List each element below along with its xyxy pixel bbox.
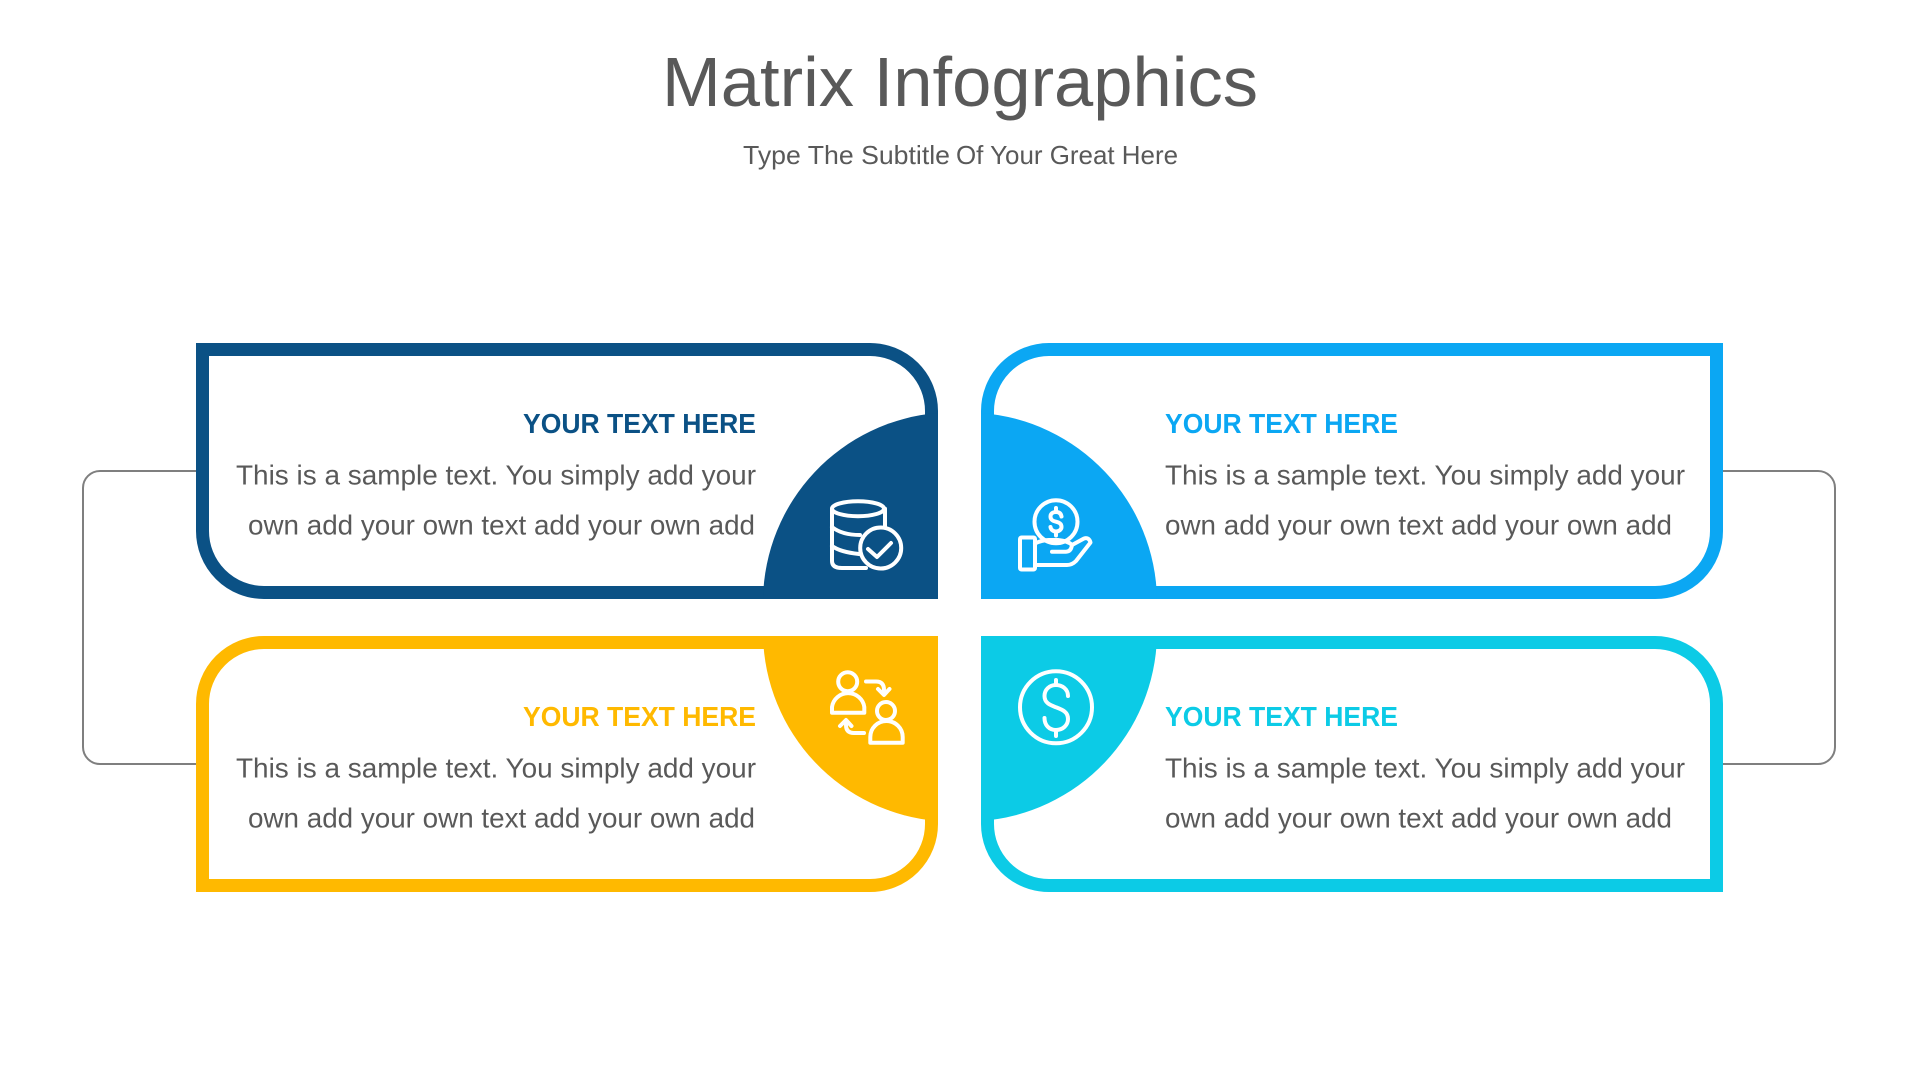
body text [1165, 460, 1685, 540]
body text: own add your own text add your own add [1165, 802, 1672, 834]
panel: top left navy [202, 350, 938, 599]
body text: This is a sample text. You simply add your [1165, 752, 1685, 784]
heading: YOUR TEXT HERE [1165, 701, 1398, 732]
panel border [202, 642, 932, 886]
heading: YOUR TEXT HERE [1165, 408, 1398, 439]
body text: This is a sample text. You simply add your [236, 460, 756, 490]
body text: own add your own text add your own add [248, 802, 755, 834]
panel border [988, 350, 1716, 592]
body text [236, 752, 756, 834]
heading: YOUR TEXT HERE [523, 701, 756, 732]
right connector line [1709, 471, 1835, 764]
title: Matrix Infographics [662, 43, 1258, 121]
corner wedge [763, 636, 938, 821]
subtitle: Of Your Great Here [956, 140, 1178, 170]
icon: people exchange [832, 672, 903, 743]
left connector line [83, 471, 196, 764]
panel: bottom right cyan [981, 636, 1716, 886]
body text: This is a sample text. You simply add your [1165, 460, 1685, 490]
icon: hand holding coin [1020, 500, 1090, 570]
subtitle: Type The Subtitle [743, 140, 950, 170]
icon: dollar coin [1020, 671, 1092, 743]
body text: own add your own text add your own add [248, 510, 755, 540]
corner wedge [981, 636, 1157, 821]
body text [236, 460, 756, 540]
body text [1165, 752, 1685, 834]
panel: bottom left yellow [202, 636, 938, 886]
heading: YOUR TEXT HERE [523, 408, 756, 439]
body text: own add your own text add your own add [1165, 510, 1672, 540]
panel border [202, 350, 932, 592]
panel: top right blue [981, 350, 1716, 599]
corner wedge [981, 413, 1157, 599]
icon: database check [832, 501, 901, 568]
body text: This is a sample text. You simply add your [236, 752, 756, 784]
corner wedge [763, 413, 938, 599]
subtitle [743, 140, 1178, 170]
panel border [988, 642, 1716, 886]
